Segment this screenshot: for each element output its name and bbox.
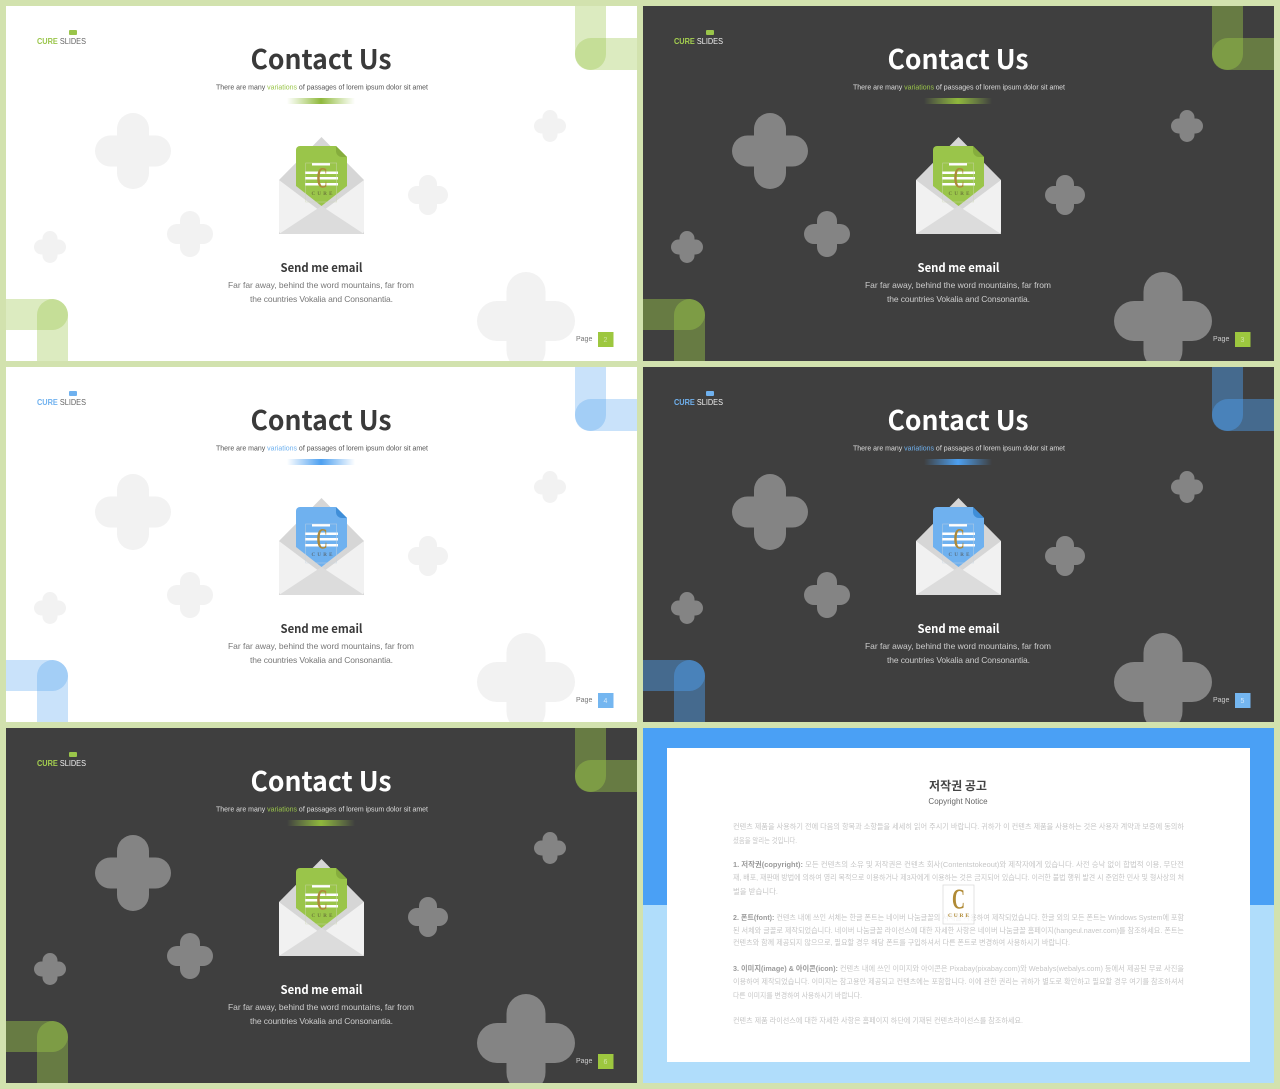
icon: envelope: CURE: [312, 192, 333, 197]
title: Contact Us: [888, 399, 1028, 438]
subtitle: There are many variations of passages of lorem ipsum dolor sit amet: [216, 84, 428, 92]
description: Far far away, behind the word mountains, far from: [228, 1002, 414, 1012]
heading: send me email: Send me email: [918, 620, 1000, 637]
page number: [1213, 693, 1250, 708]
description: [865, 641, 1051, 665]
icon: envelope: CURE: [948, 192, 970, 197]
page number: Page: [1213, 336, 1229, 343]
notice body text: 셨음을 알리는 것입니다.: [733, 835, 797, 845]
description: the countries Vokalia and Consonantia.: [250, 1016, 393, 1026]
accent bar: [287, 98, 355, 104]
logo: CURE SLIDES: [37, 759, 86, 768]
title: Contact Us: [250, 38, 392, 77]
heading: send me email: Send me email: [280, 620, 363, 637]
icon: envelope: CURE: [312, 914, 333, 919]
icon: envelope: [279, 137, 364, 234]
logo: [674, 30, 723, 44]
icon: envelope: [279, 859, 364, 956]
notice body text: 컨텐츠 제품 라이선스에 대한 자세한 사항은 홈페이지 하단에 기재된 컨텐츠라이선스를 참조하세요.: [733, 1015, 1023, 1025]
notice title: 저작권 공고: [929, 777, 987, 794]
notice body text: 1. 저작권(copyright): 모든 컨텐츠의 소유 및 저작권은 컨텐츠 회사(Contentstokeout)와 제작자에게 있습니다. 사전 승낙 없이 합법적 이용, 무단전: [733, 859, 1184, 869]
panel: copyright notice: [643, 728, 1274, 1083]
icon: gold C stamp: CURE: [948, 913, 969, 919]
logo: [37, 391, 86, 405]
notice body text: 벌을 받습니다.: [733, 886, 778, 896]
background crosses: [671, 471, 1212, 731]
accent bar: [924, 98, 992, 104]
notice subtitle: Copyright Notice: [928, 797, 988, 806]
description: the countries Vokalia and Consonantia.: [887, 294, 1030, 304]
background crosses: [34, 832, 575, 1089]
page number: [576, 332, 614, 347]
icon: envelope: [916, 137, 1001, 234]
panel: dark green slide: [637, 0, 1277, 370]
page number: 4: [604, 698, 608, 705]
accent bar: [287, 820, 355, 826]
subtitle: There are many variations of passages of lorem ipsum dolor sit amet: [216, 806, 428, 814]
heading: send me email: Send me email: [280, 981, 363, 998]
icon: envelope: CURE: [948, 553, 970, 558]
page number: Page: [576, 1058, 592, 1065]
notice body text: 컨텐츠 제품을 사용하기 전에 다음의 항목과 소항들을 세세히 읽어 주시기 바랍니다. 귀하가 이 컨텐츠 제품을 사용하는 것은 사용자 계약과 보증에 동의하: [733, 821, 1184, 831]
title: Contact Us: [250, 399, 392, 438]
description: Far far away, behind the word mountains, far from: [228, 280, 414, 290]
logo: CURE SLIDES: [674, 398, 723, 407]
panel: white green slide: [0, 0, 640, 370]
corner ribbon: top right: [575, 722, 640, 792]
description: the countries Vokalia and Consonantia.: [250, 294, 393, 304]
title: Contact Us: [250, 760, 392, 799]
corner ribbon: top right: [575, 6, 637, 70]
notice body text: [733, 821, 1184, 1025]
subtitle: There are many variations of passages of lorem ipsum dolor sit amet: [853, 84, 1065, 92]
logo: CURE SLIDES: [37, 398, 86, 407]
description: [228, 282, 414, 302]
heading: send me email: Send me email: [280, 259, 363, 276]
notice body text: 이용하여 제작되었습니다. 이미지는 참고용만 제공되고 컨텐츠에는 포함합니다. 이에 관한 권리는 귀하가 별도로 확인하고 필요할 경우 여기를 참조하셔서: [733, 976, 1184, 986]
subtitle: There are many variations of passages of lorem ipsum dolor sit amet: [853, 446, 1065, 452]
icon: envelope: C: [316, 162, 328, 194]
page number: 3: [1241, 337, 1245, 344]
accent bar: [287, 459, 355, 465]
corner ribbon: top right: [1212, 6, 1274, 70]
icon: envelope: [279, 498, 364, 595]
description: [866, 282, 1050, 302]
icon: envelope: C: [316, 884, 328, 916]
corner ribbon: bottom left: [643, 660, 705, 722]
icon: envelope: CURE: [312, 553, 333, 558]
corner ribbon: bottom left: [6, 299, 68, 361]
description: the countries Vokalia and Consonantia.: [887, 655, 1030, 665]
background crosses: [671, 110, 1212, 370]
page number: [576, 693, 614, 708]
page number: 5: [1241, 698, 1245, 705]
logo: [37, 30, 86, 44]
logo: [37, 752, 86, 768]
notice body text: 된 서체와 글꼴로 제작되었습니다. 네이버 나눔글꼴 라이선스에 대한 자세한 사항은 네이버 나눔글꼴 홈페이지(hangeul.naver.com)를 참조하세요. 폰트는: [733, 925, 1184, 935]
description: [228, 1002, 414, 1026]
icon: envelope: C: [316, 522, 328, 556]
description: Far far away, behind the word mountains, far from: [865, 280, 1051, 290]
notice body text: 2. 폰트(font): 컨텐츠 내에 쓰인 서체는 한글 폰트는 네이버 나눔글꼴의 서체를 사용하여 제작되었습니다. 한글 외의 모든 폰트는 Windows System에 포함: [733, 912, 1184, 922]
accent bar: [924, 459, 992, 465]
page number: 2: [604, 337, 608, 344]
description: [228, 643, 414, 663]
notice body text: 재, 배포, 재판매 방법에 의하여 영리 목적으로 이용하거나 제3자에게 이용하는 것은 금지되어 있습니다. 이러한 불법 행위 발견 시 준엄한 민사 및 형사상의 처: [733, 872, 1184, 882]
description: Far far away, behind the word mountains, far from: [228, 641, 414, 651]
corner ribbon: top right: [575, 367, 637, 431]
notice body text: 다른 이미지를 변경하여 사용하시기 바랍니다.: [733, 990, 862, 1000]
icon: envelope: C: [954, 162, 964, 194]
corner ribbon: top right: [1212, 367, 1274, 431]
logo: [674, 391, 723, 407]
logo: CURE SLIDES: [674, 37, 723, 46]
corner ribbon: bottom left: [643, 299, 705, 361]
page number: Page: [576, 697, 592, 704]
subtitle: There are many variations of passages of lorem ipsum dolor sit amet: [216, 446, 428, 452]
heading: send me email: Send me email: [918, 259, 1000, 276]
page number: [576, 1054, 614, 1069]
logo: CURE SLIDES: [37, 37, 86, 46]
corner ribbon: bottom left: [6, 660, 68, 722]
icon: gold C stamp: [943, 884, 974, 924]
description: the countries Vokalia and Consonantia.: [250, 655, 393, 665]
notice body text: 컨텐츠와 함께 제공되지 않으므로, 필요할 경우 해당 폰트를 구입하셔서 다른 폰트로 변경하여 사용하시기 바랍니다.: [733, 937, 1070, 947]
page number: Page: [1213, 697, 1229, 704]
panel: dark blue slide: [637, 361, 1277, 731]
title: Contact Us: [888, 38, 1028, 77]
notice sheet: [667, 748, 1250, 1062]
notice body text: 3. 이미지(image) & 아이콘(icon): 컨텐츠 내에 쓰인 이미지와 아이콘은 Pixabay(pixabay.com)와 Webalys(webalys.com) 등에서 제공된 무료 사진을: [733, 963, 1184, 973]
corner ribbon: bottom left: [0, 1021, 68, 1089]
page number: 6: [604, 1059, 608, 1066]
icon: gold C stamp: C: [952, 884, 965, 916]
background crosses: [34, 110, 575, 370]
icon: envelope: C: [954, 522, 964, 556]
icon: envelope: [916, 498, 1001, 595]
description: Far far away, behind the word mountains, far from: [865, 641, 1051, 651]
background crosses: [34, 471, 575, 731]
page number: [1213, 332, 1250, 347]
panel: dark green slide, third row: [0, 722, 640, 1089]
panel: white blue slide: [0, 361, 640, 731]
page number: Page: [576, 336, 592, 343]
